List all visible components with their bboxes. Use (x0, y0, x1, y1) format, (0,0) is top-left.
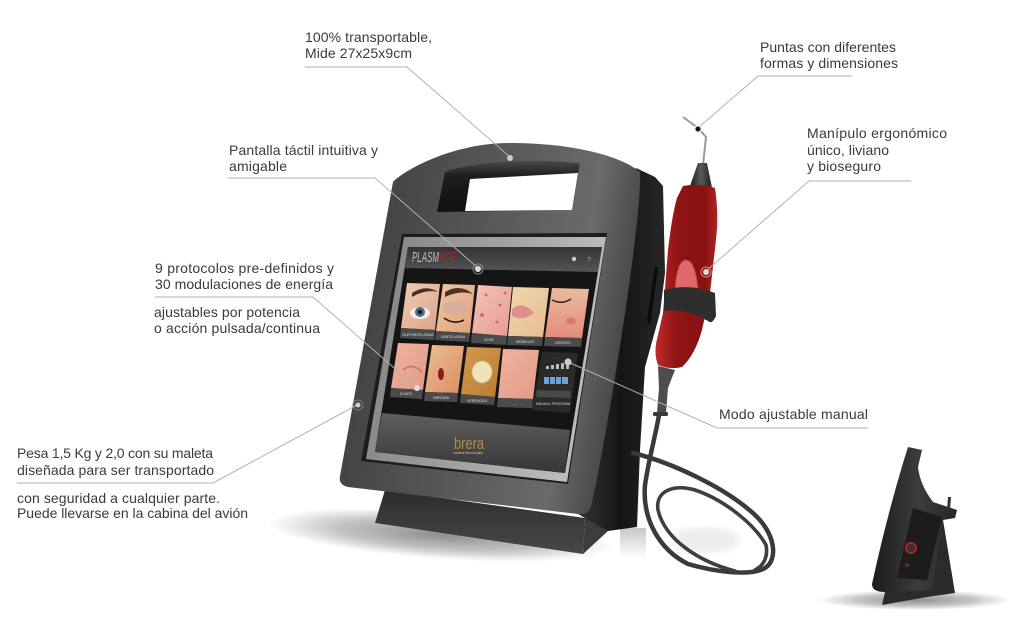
callout: weight: diseñada para ser transportado (17, 462, 214, 478)
screen bottom band: medical technologies (453, 451, 483, 455)
callout: transportable (305, 29, 432, 61)
handpiece (653, 117, 717, 416)
callout: protocols: ajustables por potencia (154, 304, 300, 320)
screen top bar: AGE (438, 249, 457, 266)
photo tile: lips (507, 287, 549, 346)
photo tile: verrugas (460, 347, 501, 405)
photo tile: acne (471, 285, 512, 345)
screen top bar: ? (587, 257, 591, 264)
callout: protocols (154, 260, 334, 336)
main device (340, 143, 665, 554)
photo tile: fibroma: FIBROMA (433, 396, 450, 400)
callout: manual mode: Modo ajustable manual (719, 406, 868, 422)
photo tile: eye (400, 283, 440, 340)
photo tile: closed eye (435, 284, 475, 342)
photo tile: blank skin (497, 349, 539, 408)
screen (361, 233, 607, 484)
handpiece tip (683, 117, 712, 188)
callout: protocols: 9 protocolos pre-definidos y (155, 260, 334, 276)
callout: handpiece: Manípulo ergonómico (807, 125, 947, 141)
handpiece grip connector (653, 366, 675, 416)
manual mode panel (532, 352, 578, 413)
device stand (375, 490, 608, 554)
manual mode panel: MANUAL PROGRAM (536, 402, 570, 406)
side view device (819, 447, 1011, 610)
callout: tips: Puntas con diferentes (760, 39, 896, 55)
photo tile: eye: BLEFAROPLASMA (402, 333, 434, 337)
callout: touchscreen: amigable (229, 158, 287, 174)
photo tile: blank skin: ... (514, 402, 516, 406)
photo tile: verrugas: VERRUGAS (467, 399, 488, 403)
photo tile: closed eye: XANTELASMA (441, 335, 466, 339)
device side casing (578, 168, 665, 531)
callout: touchscreen: Pantalla táctil intuitiva y (229, 142, 378, 158)
photo tile: lentigo (544, 288, 589, 347)
screen bottom band (375, 413, 570, 473)
photo tile: lips: WRINKLES (516, 340, 535, 344)
device front casing (340, 143, 640, 514)
handpiece cable (633, 415, 773, 573)
callout: touchscreen (229, 142, 378, 174)
holder band (664, 287, 716, 322)
photo tile: fibroma (424, 345, 464, 402)
screen top bar (405, 247, 602, 272)
callout: transportable: 100% transportable, (305, 29, 432, 45)
callout: weight: Pesa 1,5 Kg y 2,0 con su maleta (17, 445, 213, 461)
photo tile: scars: SCARS (400, 392, 413, 396)
handle opening (437, 161, 580, 212)
leader lines (17, 67, 911, 483)
callout: tips: formas y dimensiones (760, 55, 898, 71)
callout: weight: Puede llevarse en la cabina del avión (17, 505, 248, 521)
callout: weight: con seguridad a cualquier parte. (17, 490, 220, 506)
callout: handpiece (807, 125, 947, 174)
callout: handpiece: y bioseguro (807, 158, 881, 174)
marker dots (353, 125, 711, 410)
photo tile: scars (390, 343, 429, 399)
screen bottom band: brera (454, 434, 484, 453)
callout: protocols: 30 modulaciones de energía (155, 276, 333, 292)
handpiece highlight (675, 260, 698, 288)
callout: protocols: o acción pulsada/continua (154, 320, 320, 336)
callout: weight (17, 445, 248, 521)
callout: handpiece: único, liviano (807, 142, 889, 158)
cable port slot (647, 267, 658, 325)
callout: tips (760, 39, 898, 71)
photo tile: lentigo: LENTIGO (555, 341, 571, 345)
callout: transportable: Mide 27x25x9cm (305, 45, 412, 61)
floor shadow: main device (267, 499, 740, 571)
screen top bar: PLASM (412, 249, 439, 266)
photo tile: acne: ACNE (484, 338, 495, 342)
handpiece red body (656, 185, 717, 368)
